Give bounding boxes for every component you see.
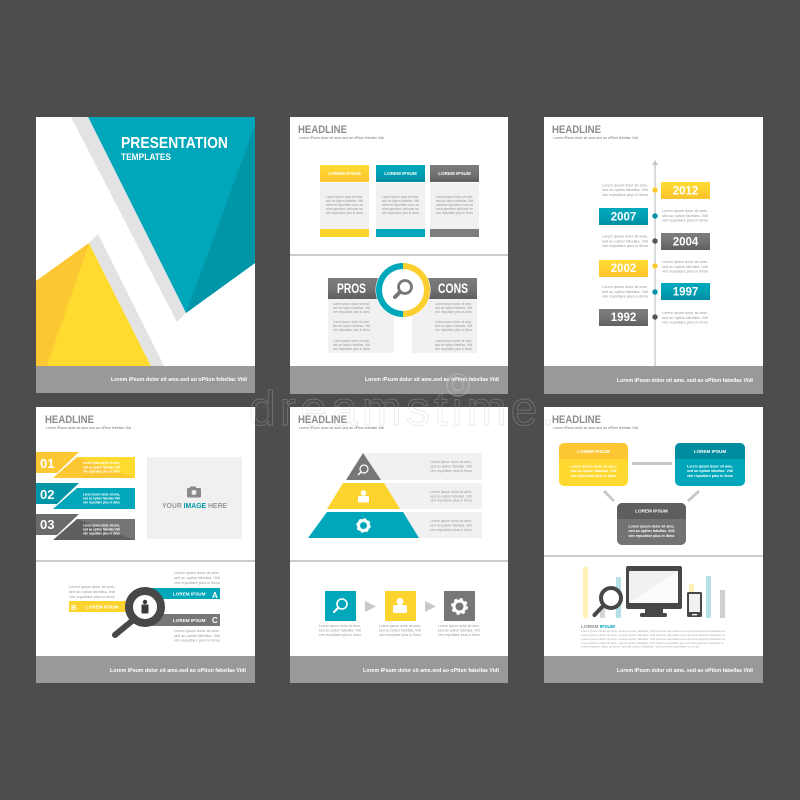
ribbon 02: vim repudiare plus in lbmo (83, 500, 120, 504)
grey lower stripe (89, 234, 164, 366)
timeline entry 2007: vim repudiare plus in lbmo (662, 218, 708, 222)
timeline entry 1997: Lorem ipsum dolor sit ame, (602, 285, 648, 289)
cons column: CONS (438, 281, 468, 296)
timeline entry 2002: sed ao option fabellas. Vidi (662, 265, 708, 269)
headline: Lorem iPsum dolor sit ame.sed ao oPtion febellac Vidi (553, 136, 638, 140)
icon: phone (687, 592, 702, 617)
panel: cover page (36, 117, 255, 393)
grey box: sed ao option fabellas. Vidi (628, 529, 675, 533)
headline (45, 414, 131, 430)
process step: search: vim repudiare plus in lbmo (319, 633, 361, 637)
note A: vim repudiare plus in lbmo (174, 581, 220, 585)
headline (298, 124, 384, 140)
teal box: sed ao option fabellas. Vidi (687, 469, 733, 473)
pyramid notes: sed ao option fabellas. Vidi (430, 524, 472, 528)
timeline entry 2004: sed ao option fabellas. Vidi (602, 240, 648, 244)
yellow card: Lorem ipsum dolor sit ame, (326, 195, 363, 199)
footer (544, 366, 763, 394)
pyramid notes: sed ao option fabellas. Vidi (430, 494, 472, 498)
icon: monitor (626, 566, 682, 617)
timeline entry 1992 (599, 309, 708, 326)
panel: numbered list and magnifier (36, 407, 255, 683)
note A: Lorem ipsum dolor sit ame, (174, 571, 220, 575)
pros column: sed ao option fabellas. Vidi (333, 306, 370, 310)
footer (290, 366, 508, 394)
yellow box: vim repudiare plus in lbmo (570, 474, 616, 478)
cons column: sed ao option fabellas. Vidi (435, 343, 472, 347)
timeline entry 1992: 1992 (611, 312, 636, 324)
grey box: vim repudiare plus in lbmo (628, 534, 674, 538)
pyramid notes: vim repudiare plus in lbmo (430, 469, 472, 473)
pyramid notes: Lorem ipsum dolor sit ame, (430, 460, 472, 464)
grey cover stripe (71, 117, 186, 322)
process step: person (379, 591, 421, 637)
ribbon 01 (36, 452, 135, 478)
devices text: Lorem ipsum dolor sit ame, sed ao option fabellas. Vidi ceteros repudiare eum ad mea aperiam delicata ne (581, 637, 725, 641)
devices text: LOREM IPSUM (581, 624, 615, 630)
timeline axis arrow (652, 160, 658, 366)
devices text: Lorem ipsum dolor sit ame, sed ao option fabellas. Vidi ceteros repudiare eum ad (581, 644, 699, 648)
footer (544, 656, 763, 683)
footer (290, 656, 508, 683)
ribbon 02: 02 (40, 487, 54, 502)
pyramid notes: sed ao option fabellas. Vidi (430, 464, 472, 468)
pros column: Lorem ipsum dolor sit ame, (333, 302, 370, 306)
note B: vim repudiare plus in lbmo (69, 595, 115, 599)
cons column: vim repudiare plus in lbmo (435, 328, 472, 332)
cons column: sed ao option fabellas. Vidi (435, 306, 472, 310)
teal box (675, 443, 745, 486)
note A: sed ao option fabellas. Vidi (174, 576, 220, 580)
footer: Lorem iPsum dolor sit ame. sed ao oPtion fabellas Vidi (617, 668, 753, 674)
headline (552, 124, 638, 140)
headline: HEADLINE (45, 414, 94, 426)
teal box: Lorem ipsum dolor sit ame, (687, 464, 733, 468)
timeline entry 2002: Lorem ipsum dolor sit ame, (662, 260, 708, 264)
headline: HEADLINE (298, 124, 347, 136)
process step: search: sed ao option fabellas. Vidi (319, 628, 361, 632)
panel: flow diagram and devices (544, 407, 763, 683)
headline (552, 414, 638, 430)
yellow cover shape (36, 243, 151, 366)
timeline entry 2002 (599, 260, 708, 277)
yellow box: sed ao option fabellas. Vidi (570, 469, 617, 473)
grey card: ceteros repudiare eum ad (436, 203, 473, 207)
note C: vim repudiare plus in lbmo (174, 638, 220, 642)
process step: person: sed ao option fabellas. Vidi (379, 628, 421, 632)
cover subtitle: TEMPLATES (121, 152, 171, 162)
process step: person: vim repudiare plus in lbmo (379, 633, 421, 637)
process step: person: Lorem ipsum dolor sit ame, (379, 624, 421, 628)
grey box (617, 503, 686, 545)
panel: timeline (544, 117, 763, 394)
icon: camera (187, 486, 201, 498)
grey card: sed ao option fabellas. Vidi (436, 199, 473, 203)
timeline entry 1997: vim repudiare plus in lbmo (602, 294, 648, 298)
timeline entry 2004 (602, 233, 710, 250)
cons column: vim repudiare plus in lbmo (435, 347, 472, 351)
footer: Lorem iPsum dolor sit ame.sed ao oPtion fabellas Vidi (110, 668, 246, 674)
teal card: Lorem ipsum dolor sit ame, (382, 195, 419, 199)
teal card: ceteros repudiare eum ad (382, 203, 419, 207)
headline: HEADLINE (552, 124, 601, 136)
image placeholder: YOUR IMAGE HERE (162, 503, 227, 510)
ribbon 03 (36, 514, 135, 540)
pros column: vim repudiare plus in lbmo (333, 310, 370, 314)
footer (36, 656, 255, 683)
pale bar chart (583, 567, 725, 618)
note C (174, 629, 220, 642)
icon: magnifier with person (115, 591, 161, 635)
footer: Lorem iPsum dolor sit ame.sed ao oPtion fabellas Vidi (365, 377, 499, 383)
teal card (376, 165, 425, 237)
pros column: sed ao option fabellas. Vidi (333, 324, 370, 328)
headline: Lorem iPsum dolor sit ame.sed ao oPtion febellac Vidi (299, 136, 384, 140)
timeline entry 1992: sed ao option fabellas. Vidi (662, 316, 708, 320)
grey card (430, 165, 479, 237)
grey card: vim repudiare plus in lbmo (436, 211, 473, 215)
headline: Lorem iPsum dolor sit ame.sed ao oPtion febellac Vidi (553, 426, 638, 430)
timeline entry 1997: 1997 (673, 286, 698, 298)
teal card: vim repudiare plus in lbmo (382, 211, 419, 215)
timeline entry 1992: Lorem ipsum dolor sit ame, (662, 311, 708, 315)
watermark: dreamstime. (249, 383, 555, 436)
bar B: LOREM IPSUM (86, 604, 119, 610)
timeline entry 2012 (602, 182, 710, 199)
timeline entry 2004: vim repudiare plus in lbmo (602, 244, 648, 248)
yellow box: LOREM IPSUM (577, 449, 610, 454)
bar A (150, 588, 220, 600)
yellow card: LOREM IPSUM (328, 171, 361, 176)
teal box: vim repudiare plus in lbmo (687, 474, 733, 478)
timeline entry 2007: sed ao option fabellas. Vidi (662, 214, 708, 218)
ribbon 01: sed ao option fabellas Vidi (83, 466, 120, 470)
timeline entry 1997: sed ao option fabellas. Vidi (602, 290, 648, 294)
timeline entry 2012: vim repudiare plus in lbmo (602, 193, 648, 197)
yellow card: ceteros repudiare eum ad (326, 203, 363, 207)
timeline entry 2004: Lorem ipsum dolor sit ame, (602, 234, 648, 238)
note C: Lorem ipsum dolor sit ame, (174, 629, 220, 633)
teal card: sed ao option fabellas. Vidi (382, 199, 419, 203)
cons column: Lorem ipsum dolor sit ame, (435, 320, 472, 324)
panel: cards and pros cons (290, 117, 508, 394)
bar A: A (212, 591, 218, 600)
ribbon 03: Lorem ipsum dolor sit ame, (83, 524, 120, 528)
note C: sed ao option fabellas. Vidi (174, 634, 220, 638)
note B: sed ao option fabellas. Vidi (69, 590, 115, 594)
image placeholder (147, 457, 242, 539)
timeline entry 2012: sed ao option fabellas. Vidi (602, 188, 648, 192)
cons column: Lorem ipsum dolor sit ame, (435, 339, 472, 343)
timeline entry 1997 (602, 283, 710, 300)
note A (174, 571, 220, 585)
pyramid (308, 453, 419, 538)
timeline entry 2004: 2004 (673, 236, 699, 248)
devices text: Lorem ipsum dolor sit ame, sed ao option fabellas. Vidi ceteros repudiare eum ad mea aperiam delicata ne (581, 641, 724, 645)
yellow card: mea aperiam delicata ne (326, 207, 363, 211)
bar C: LOREM IPSUM (173, 618, 206, 623)
ribbon 01: 01 (40, 456, 54, 471)
pros column: vim repudiare plus in lbmo (333, 328, 370, 332)
pros column: Lorem ipsum dolor sit ame, (333, 339, 370, 343)
grey card: LOREM IPSUM (438, 171, 471, 176)
timeline entry 2002: 2002 (611, 263, 636, 275)
timeline entry 2007: Lorem ipsum dolor sit ame, (662, 209, 708, 213)
grey card: Lorem ipsum dolor sit ame, (436, 195, 473, 199)
ribbon 03: 03 (40, 517, 54, 532)
pyramid notes: Lorem ipsum dolor sit ame, (430, 490, 472, 494)
ribbon 03: vim repudiare plus in lbmo (83, 532, 120, 536)
ribbon 02: Lorem ipsum dolor sit ame, (83, 492, 120, 496)
timeline entry 2012: Lorem ipsum dolor sit ame, (602, 184, 648, 188)
pyramid notes (363, 453, 482, 538)
panel: pyramid and process (290, 407, 508, 683)
pyramid notes: vim repudiare plus in lbmo (430, 498, 472, 502)
arrow (365, 601, 376, 612)
process step: gear: sed ao option fabellas. Vidi (438, 628, 480, 632)
bar C: C (212, 616, 218, 625)
pros column (328, 278, 403, 353)
footer: Lorem iPsum dolor sit ame.sed ao oPtion fabellas Vidi (363, 668, 499, 674)
footer: Lorem iPsum dolor sit ame. sed ao oPtion fabellas Vidi (617, 378, 753, 384)
headline: HEADLINE (298, 414, 347, 426)
cover footer: Lorem iPsum dolor sit ame.sed ao oPtion febellac Vidi (111, 377, 247, 383)
process step: gear (438, 591, 480, 637)
grey box: Lorem ipsum dolor sit ame, (628, 524, 675, 528)
note B (69, 585, 115, 599)
headline: Lorem iPsum dolor sit ame.sed ao oPtion febellac Vidi (299, 426, 384, 430)
timeline entry 2002: vim repudiare plus in lbmo (662, 270, 708, 274)
note B: Lorem ipsum dolor sit ame, (69, 585, 115, 589)
process step: search (319, 591, 361, 637)
yellow box: Lorem ipsum dolor sit ame, (570, 464, 617, 468)
ribbon 02: sed ao option fabellas Vidi (83, 496, 120, 500)
teal card: LOREM IPSUM (384, 171, 417, 176)
ribbon 01: vim repudiare plus in lbmo (83, 470, 120, 474)
devices text (581, 624, 725, 648)
pyramid notes: vim repudiare plus in lbmo (430, 528, 472, 532)
process step: search: Lorem ipsum dolor sit ame, (319, 624, 361, 628)
teal card: mea aperiam delicata ne (382, 207, 419, 211)
timeline entry 2007: 2007 (611, 212, 636, 224)
icon: magnifier (594, 588, 621, 615)
cover footer (36, 366, 255, 393)
grey box: LOREM IPSUM (635, 508, 668, 514)
timeline entry 2007 (599, 208, 708, 225)
bar B: B (71, 603, 77, 612)
timeline entry 2012: 2012 (673, 186, 698, 198)
pros column: sed ao option fabellas. Vidi (333, 343, 370, 347)
devices text: Lorem ipsum dolor sit ame, sed ao option fabellas. Vidi ceteros repudiare eum ad mea aperiam delicata ne (581, 633, 725, 637)
cover title: PRESENTATION (121, 135, 228, 152)
headline: Lorem iPsum dolor sit ame.sed ao oPtion febellac Vidi (46, 426, 131, 430)
pros cons ring with magnifier (376, 262, 430, 318)
teal cover shape (88, 117, 255, 313)
pyramid notes: Lorem ipsum dolor sit ame, (430, 519, 472, 523)
connectors (604, 462, 699, 501)
pros column: PROS (337, 281, 366, 296)
bar C (150, 614, 220, 626)
cons column: vim repudiare plus in lbmo (435, 310, 472, 314)
pros column: Lorem ipsum dolor sit ame, (333, 320, 370, 324)
ribbon 01: Lorem ipsum dolor sit ame, (83, 461, 120, 465)
yellow card: sed ao option fabellas. Vidi (326, 199, 363, 203)
process step: gear: Lorem ipsum dolor sit ame, (438, 624, 480, 628)
cons column: sed ao option fabellas. Vidi (435, 324, 472, 328)
arrow (425, 601, 436, 612)
bar A: LOREM IPSUM (173, 592, 206, 596)
cons column: Lorem ipsum dolor sit ame, (435, 302, 472, 306)
ribbon 02 (36, 483, 135, 509)
yellow card: vim repudiare plus in lbmo (326, 211, 363, 215)
cons column (403, 278, 477, 353)
teal box: LOREM IPSUM (694, 449, 726, 454)
ribbon 03: sed ao option fabellas Vidi (83, 528, 120, 532)
bar B (69, 601, 130, 612)
yellow card (320, 165, 369, 237)
timeline entry 1992: vim repudiare plus in lbmo (662, 320, 708, 324)
process step: gear: vim repudiare plus in lbmo (438, 633, 480, 637)
pros column: vim repudiare plus in lbmo (333, 347, 370, 351)
grey card: mea aperiam delicata ne (436, 207, 473, 211)
devices text: Lorem ipsum dolor sit ame, sed ao option fabellas. Vidi ceteros repudiare eum ad mea aperiam delicata ne (581, 629, 725, 633)
yellow box (559, 443, 628, 486)
headline (298, 414, 384, 430)
headline: HEADLINE (552, 414, 601, 426)
